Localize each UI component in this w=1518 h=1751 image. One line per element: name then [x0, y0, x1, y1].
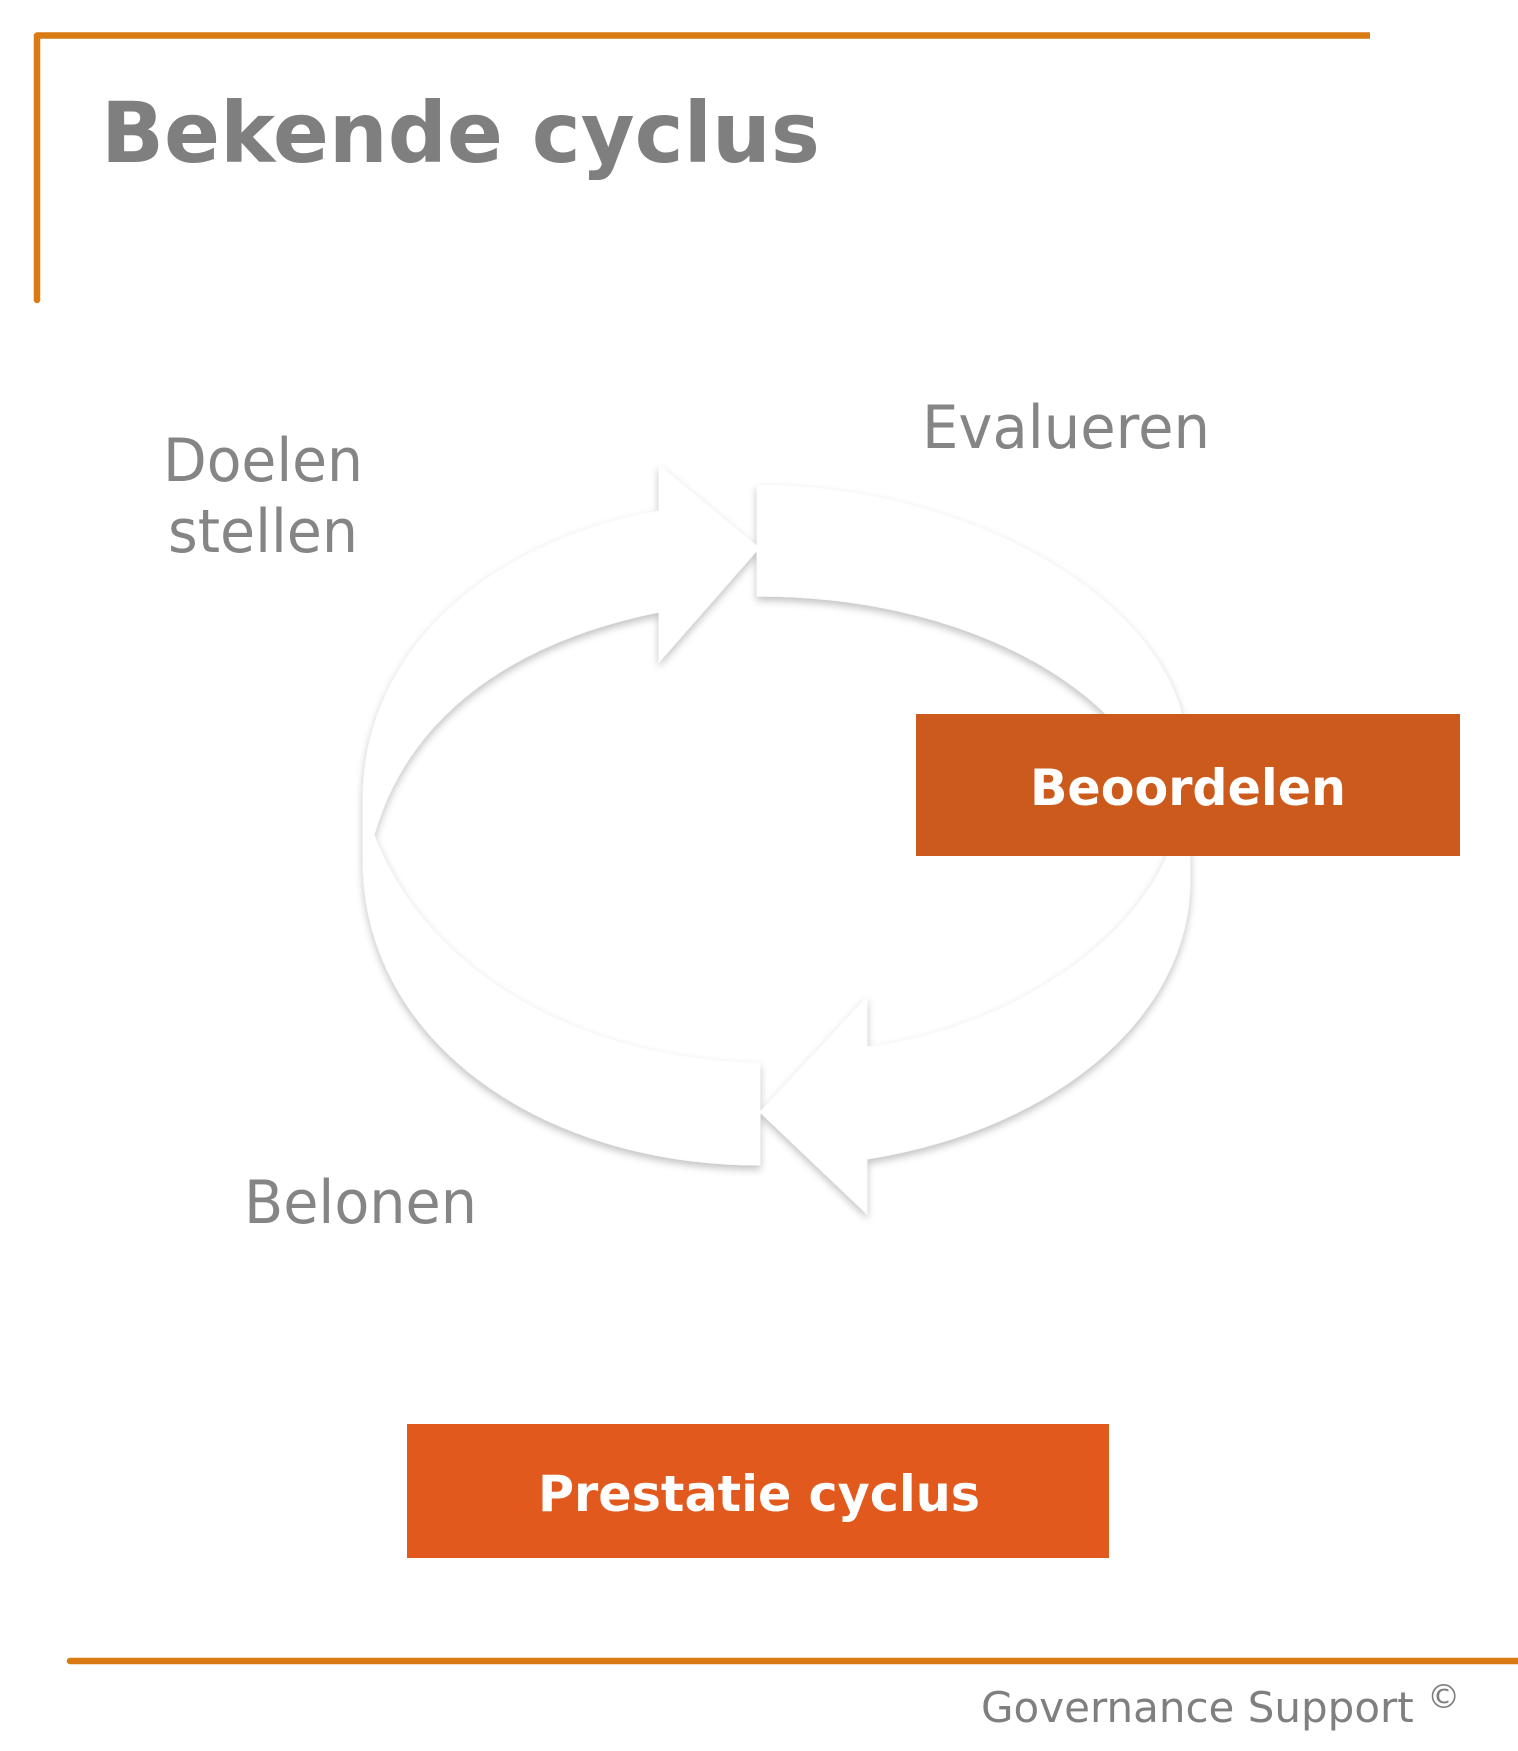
frame line: top and left [34, 36, 1370, 303]
box: Prestatie cyclus [407, 1424, 1109, 1558]
label: Belonen: Belonen [244, 1168, 477, 1238]
box: Beoordelen [916, 714, 1460, 856]
label: Evalueren: Evalueren [922, 393, 1210, 463]
box: Beoordelen: Beoordelen [1030, 759, 1346, 817]
label: Doelen stellen: Doelen [163, 426, 363, 496]
arrow: top right segment [757, 485, 1190, 861]
footer text: © [1427, 1677, 1460, 1716]
title: Bekende cyclus [101, 84, 820, 182]
footer text: Governance Support [981, 1683, 1414, 1732]
arrow: bottom left segment [363, 800, 760, 1165]
cycle diagram [363, 465, 1190, 1214]
label: Doelen stellen [163, 426, 363, 567]
arrow: top left segment [363, 465, 759, 860]
arrow: bottom right segment [760, 849, 1190, 1214]
label: Doelen stellen: stellen [168, 497, 358, 567]
box: Prestatie cyclus: Prestatie cyclus [538, 1465, 980, 1523]
footer line [70, 1658, 1518, 1664]
